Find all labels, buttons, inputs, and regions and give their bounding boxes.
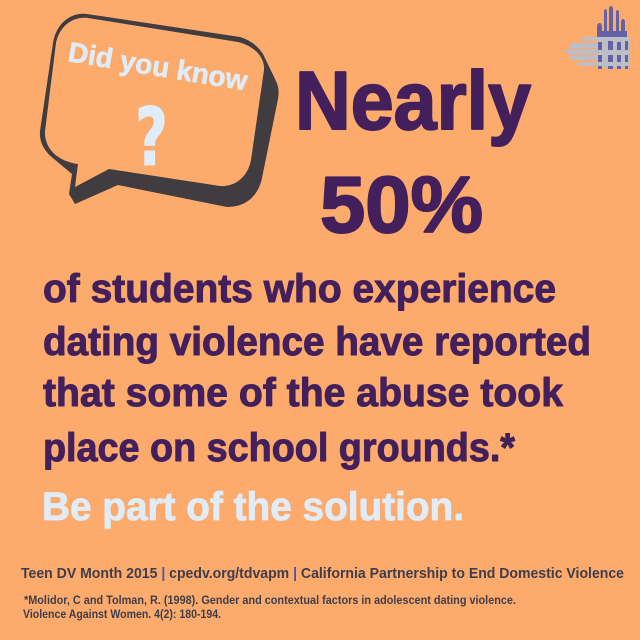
headline: 50%: 50%	[320, 160, 483, 249]
call to action: Be part of the solution.	[42, 485, 464, 529]
citation: *Molidor, C and Tolman, R. (1998). Gender and contextual factors in adolescent dating violence.	[24, 593, 516, 607]
citation	[23, 593, 516, 621]
bubble heading: Did you know	[66, 36, 250, 97]
bubble shadow and outline	[40, 14, 279, 207]
body statement	[43, 267, 591, 470]
logo: woven hands	[566, 6, 629, 69]
body statement: that some of the abuse took	[43, 371, 564, 415]
purple weave	[598, 41, 628, 69]
footer line: Teen DV Month 2015 | cpedv.org/tdvapm | California Partnership to End Domestic Violence	[21, 565, 624, 582]
citation: Violence Against Women. 4(2): 180-194.	[23, 607, 221, 621]
headline: Nearly: Nearly	[295, 54, 531, 147]
speech bubble: did you know	[40, 14, 279, 207]
body statement: dating violence have reported	[43, 320, 591, 364]
purple fingers	[597, 6, 627, 38]
body statement: place on school grounds.*	[43, 426, 515, 470]
grey strands	[566, 37, 629, 68]
bubble interior	[45, 18, 264, 187]
body statement: of students who experience	[43, 267, 556, 311]
question mark: ?	[135, 91, 168, 184]
